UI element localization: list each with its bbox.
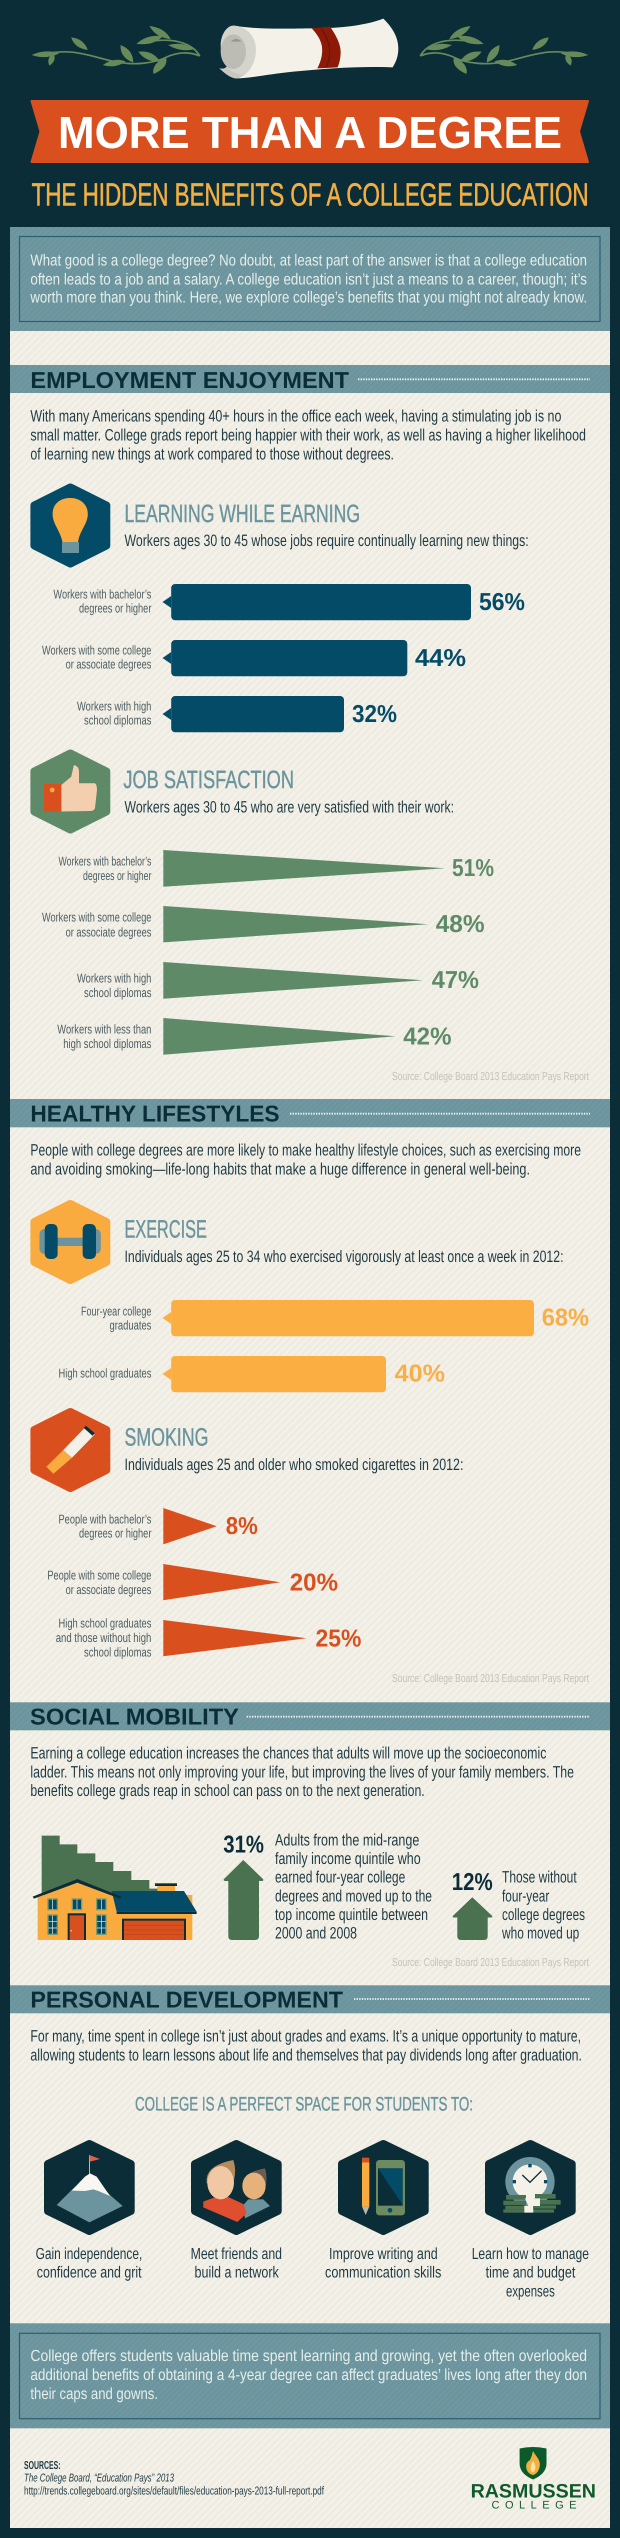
bar chart: exercise: 40% bbox=[395, 1361, 445, 1388]
icon: cigarette hexagon bbox=[34, 1412, 106, 1488]
text block: employment intro: of learning new things at work compared to those without degrees. bbox=[30, 445, 394, 463]
icon: shield with flame bbox=[520, 2447, 546, 2480]
text block: social intro: benefits college grads reap in school can pass on to the next generation. bbox=[30, 1782, 425, 1800]
stat description bbox=[275, 1831, 432, 1943]
triangle chart: smoking: People with some college bbox=[47, 1567, 151, 1582]
triangle chart: smoking: People with bachelor’s bbox=[58, 1511, 151, 1526]
captions: time and budget bbox=[486, 2265, 576, 2282]
stat: 31 percent bbox=[223, 1831, 432, 1943]
bar chart: learning: 56% bbox=[479, 589, 525, 616]
triangle chart: satisfaction: Workers with bachelor’s bbox=[58, 854, 151, 869]
stat description: Adults from the mid-range bbox=[275, 1831, 419, 1849]
arrow: up large bbox=[224, 1860, 263, 1940]
subheading: Individuals ages 25 and older who smoked cigarettes in 2012: bbox=[124, 1456, 463, 1474]
stat description: top income quintile between bbox=[275, 1906, 428, 1924]
icon: pencil and phone hexagon bbox=[342, 2144, 425, 2231]
section heading: healthy lifestyles bbox=[10, 1099, 610, 1127]
captions: Meet friends and bbox=[191, 2246, 282, 2263]
heading: perfect space: COLLEGE IS A PERFECT SPACE FOR STUDENTS TO: bbox=[135, 2093, 473, 2115]
triangle chart: smoking: or associate degrees bbox=[66, 1582, 151, 1597]
text block: employment intro bbox=[30, 408, 586, 463]
bar chart: learning: Workers with high bbox=[77, 698, 151, 713]
captions: build a network bbox=[194, 2265, 280, 2282]
triangle chart: satisfaction bbox=[42, 850, 494, 1055]
icon: right laurel sprig bbox=[420, 26, 588, 74]
icon: diploma scroll bbox=[219, 19, 398, 78]
bar chart: learning: Workers with some college bbox=[42, 642, 151, 657]
sources bbox=[24, 2460, 325, 2497]
intro text bbox=[30, 252, 587, 307]
panel: conclusion bbox=[10, 2323, 610, 2428]
sources: SOURCES: bbox=[24, 2460, 60, 2472]
section heading: personal development: PERSONAL DEVELOPMENT bbox=[30, 1986, 343, 2012]
stat description: four-year bbox=[502, 1887, 550, 1905]
panel: job satisfaction bbox=[34, 754, 590, 1083]
subheading: Workers ages 30 to 45 who are very satisfied with their work: bbox=[124, 798, 454, 816]
section heading: social mobility bbox=[10, 1702, 610, 1730]
captions bbox=[36, 2246, 589, 2301]
bar chart: learning: 44% bbox=[415, 645, 466, 672]
stat description bbox=[501, 1869, 585, 1943]
triangle chart: satisfaction: high school diplomas bbox=[63, 1036, 151, 1051]
text block: personal intro bbox=[30, 2028, 582, 2065]
stat description: family income quintile who bbox=[275, 1850, 421, 1868]
captions: confidence and grit bbox=[37, 2265, 142, 2282]
panel: learning while earning bbox=[34, 488, 529, 732]
stat: 31 percent: 31% bbox=[223, 1831, 264, 1858]
triangle chart: smoking bbox=[47, 1508, 362, 1660]
stat: 12 percent: 12% bbox=[452, 1869, 493, 1896]
bar chart: exercise: graduates bbox=[110, 1318, 151, 1333]
section heading: personal development bbox=[10, 1985, 610, 2013]
stat description: 2000 and 2008 bbox=[275, 1925, 357, 1943]
triangle chart: smoking: degrees or higher bbox=[79, 1526, 152, 1541]
bar chart: learning: degrees or higher bbox=[79, 601, 152, 616]
icon: house and stairs bbox=[33, 1836, 197, 1940]
triangle chart: satisfaction: Workers with some college bbox=[42, 910, 151, 925]
panel: smoking bbox=[34, 1412, 590, 1685]
icon: light bulb hexagon bbox=[34, 488, 106, 564]
triangle chart: satisfaction: 42% bbox=[403, 1023, 452, 1050]
icon: mountain hexagon bbox=[48, 2144, 131, 2231]
section heading: employment enjoyment bbox=[10, 365, 610, 393]
text block: social intro bbox=[30, 1744, 574, 1800]
stat description: degrees and moved up to the bbox=[275, 1887, 432, 1905]
text block: healthy intro bbox=[30, 1142, 581, 1178]
conclusion text bbox=[30, 2348, 587, 2403]
logo: Rasmussen College: RASMUSSEN bbox=[471, 2480, 596, 2502]
icon: left laurel sprig bbox=[32, 26, 200, 74]
heading: JOB SATISFACTION bbox=[123, 766, 294, 794]
conclusion text: their caps and gowns. bbox=[30, 2386, 158, 2403]
bar chart: learning: school diplomas bbox=[84, 713, 151, 728]
heading: SMOKING bbox=[124, 1423, 208, 1451]
triangle chart: smoking: and those without high bbox=[56, 1630, 151, 1645]
panel: exercise bbox=[34, 1204, 589, 1392]
bar chart: exercise: High school graduates bbox=[58, 1365, 151, 1380]
captions: Improve writing and bbox=[329, 2246, 438, 2263]
bar chart: exercise bbox=[58, 1300, 589, 1392]
stat description: who moved up bbox=[501, 1925, 579, 1943]
header bbox=[32, 19, 589, 212]
triangle chart: smoking: 20% bbox=[290, 1569, 338, 1596]
triangle chart: satisfaction: Workers with less than bbox=[57, 1021, 151, 1036]
triangle chart: satisfaction: degrees or higher bbox=[83, 868, 152, 883]
bar chart: learning bbox=[42, 584, 525, 732]
triangle chart: satisfaction: 51% bbox=[452, 855, 494, 882]
title banner bbox=[32, 101, 588, 162]
stat description: college degrees bbox=[502, 1906, 585, 1924]
stat: 12 percent bbox=[452, 1869, 585, 1943]
panel: intro bbox=[10, 227, 610, 331]
triangle chart: satisfaction: 48% bbox=[436, 911, 485, 938]
captions: communication skills bbox=[325, 2265, 441, 2282]
icon: clock and money hexagon bbox=[489, 2144, 572, 2231]
heading: LEARNING WHILE EARNING bbox=[124, 500, 360, 528]
triangle chart: satisfaction: Workers with high bbox=[77, 970, 151, 985]
bar chart: learning: 32% bbox=[352, 701, 397, 728]
triangle chart: smoking: 8% bbox=[226, 1513, 258, 1540]
section heading: employment enjoyment: EMPLOYMENT ENJOYMENT bbox=[30, 367, 349, 393]
captions: expenses bbox=[506, 2284, 555, 2301]
bar chart: exercise: 68% bbox=[542, 1305, 589, 1332]
icon: dumbbell hexagon bbox=[34, 1204, 106, 1280]
icon: thumbs up hexagon bbox=[34, 754, 106, 830]
logo: Rasmussen College bbox=[471, 2447, 596, 2512]
triangle chart: satisfaction: school diplomas bbox=[84, 985, 151, 1000]
bar chart: learning: Workers with bachelor’s bbox=[53, 586, 151, 601]
icon: friends hexagon bbox=[195, 2144, 278, 2231]
sources: The College Board, “Education Pays” 2013 bbox=[24, 2472, 174, 2484]
triangle chart: smoking: 25% bbox=[316, 1625, 362, 1652]
triangle chart: satisfaction: 47% bbox=[432, 967, 479, 994]
section heading: healthy lifestyles: HEALTHY LIFESTYLES bbox=[30, 1100, 280, 1126]
heading: EXERCISE bbox=[124, 1215, 207, 1243]
title: MORE THAN A DEGREE bbox=[58, 107, 562, 158]
captions: Gain independence, bbox=[36, 2246, 142, 2263]
sources: http://trends.collegeboard.org/sites/default/files/education-pays-2013-full-report.pdf bbox=[24, 2485, 325, 2497]
triangle chart: satisfaction: or associate degrees bbox=[66, 924, 151, 939]
stat description: Those without bbox=[502, 1869, 577, 1887]
triangle chart: smoking: school diplomas bbox=[84, 1645, 151, 1660]
arrow: up small bbox=[453, 1897, 492, 1940]
bar chart: learning: or associate degrees bbox=[66, 657, 151, 672]
triangle chart: smoking: High school graduates bbox=[58, 1616, 151, 1631]
stat description: earned four-year college bbox=[275, 1869, 405, 1887]
bar chart: exercise: Four-year college bbox=[81, 1303, 151, 1318]
logo: Rasmussen College: COLLEGE bbox=[492, 2500, 576, 2512]
section heading: social mobility: SOCIAL MOBILITY bbox=[30, 1704, 239, 1730]
